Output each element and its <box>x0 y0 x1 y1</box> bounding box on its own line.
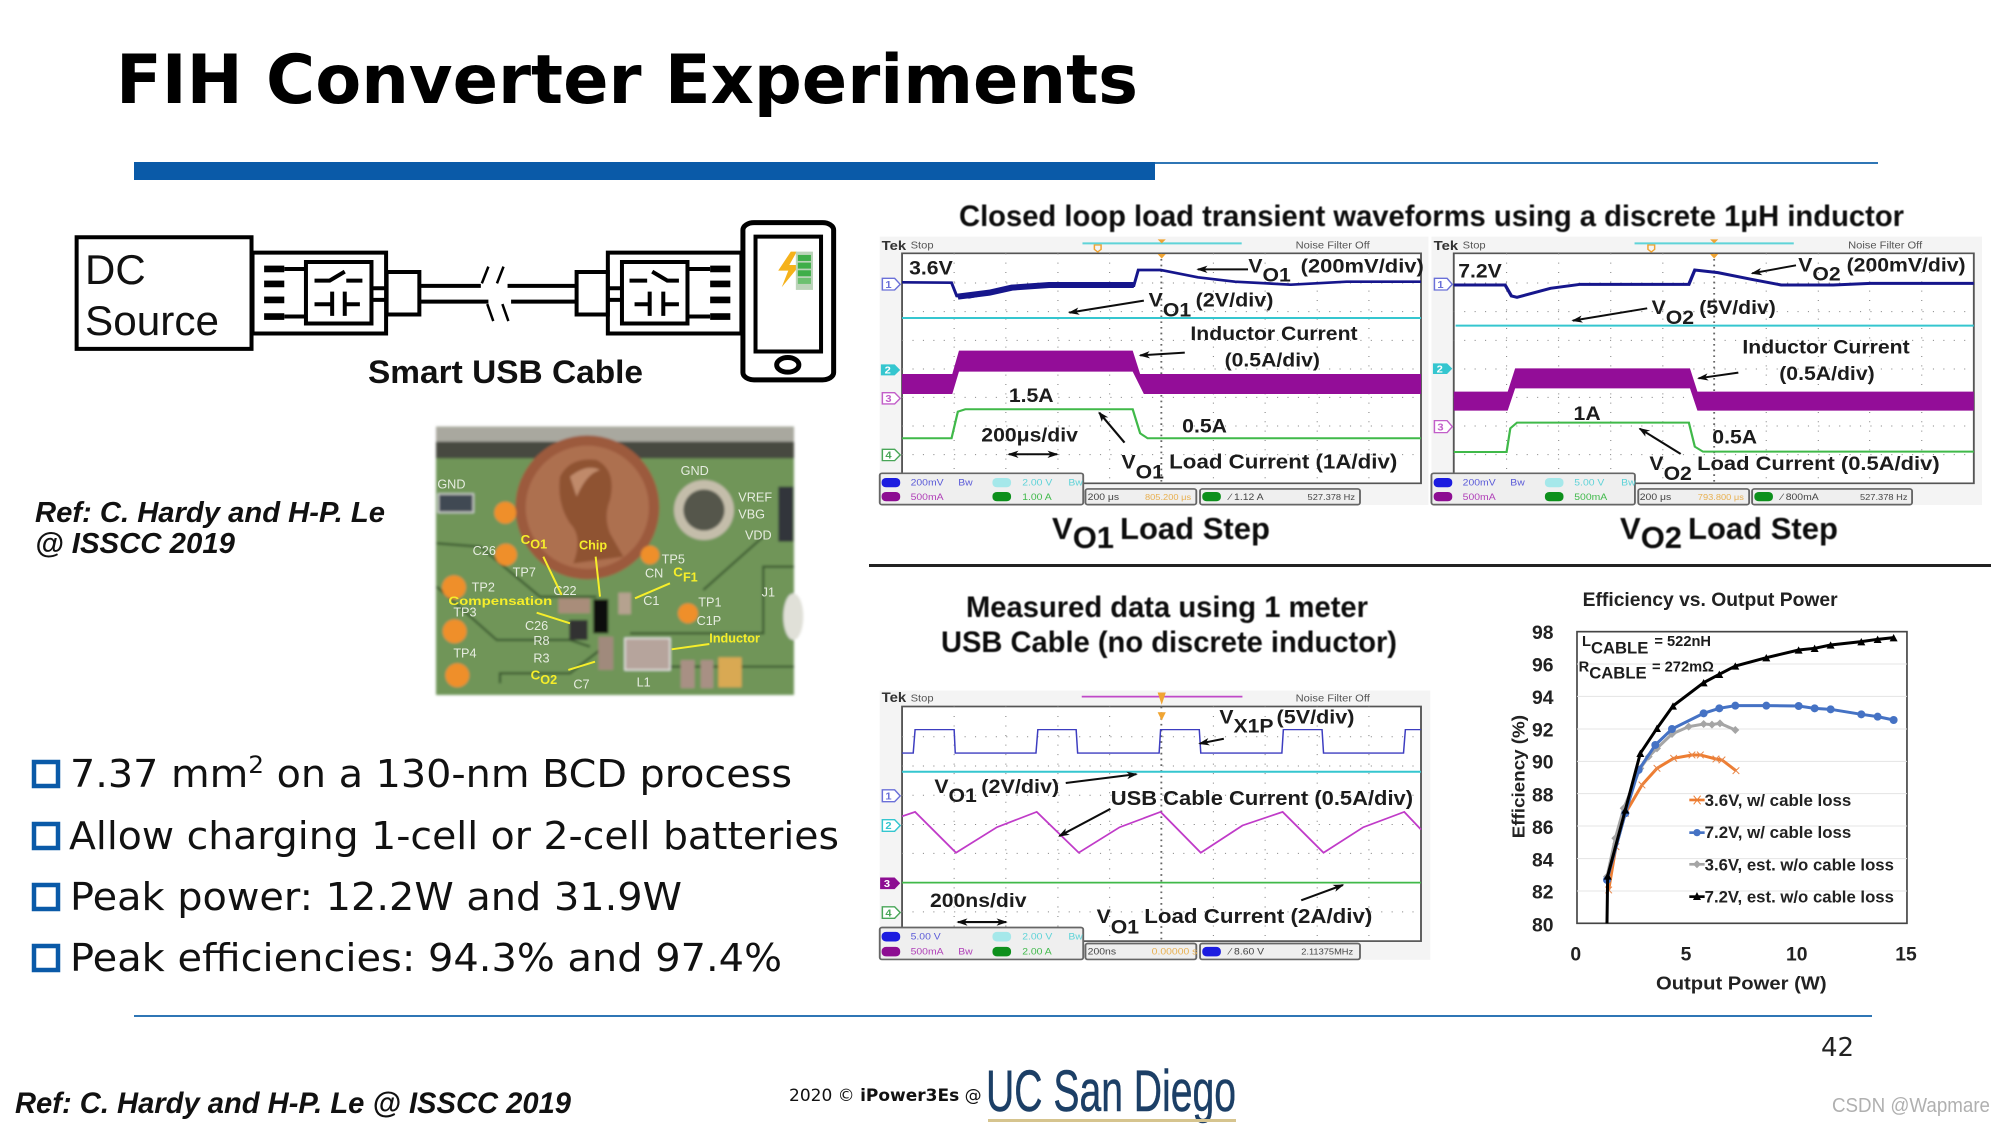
chart: efficiency vs output power <box>1509 590 1917 993</box>
silkscreen labels: GND <box>437 477 465 491</box>
readout boxes: 5.00 V <box>911 932 941 943</box>
annotations: Load Current (2A/div) <box>1144 905 1372 928</box>
photo: PCB with penny <box>436 427 803 695</box>
silkscreen labels: VBG <box>738 507 765 521</box>
series: 3.6V estimated <box>1607 723 1735 877</box>
annotations: X1P <box>1234 716 1274 737</box>
yellow annotations: Chip <box>579 538 607 552</box>
bullet 3: Peak power: 12.2W and 31.9W <box>70 875 682 920</box>
annotations <box>1458 256 1966 485</box>
caption: VO2 load step: V <box>1620 511 1641 546</box>
annotations: (0.5A/div) <box>1779 364 1875 385</box>
reference note <box>35 497 385 560</box>
annotations: 3.6V <box>909 258 953 279</box>
annotations: O1 <box>949 786 977 807</box>
readout boxes: 2.00 V <box>1022 932 1053 943</box>
trace: output voltage <box>902 315 1421 321</box>
annotations: (2V/div) <box>1196 290 1273 311</box>
silkscreen labels: C7 <box>573 677 590 691</box>
y axis labels: 84 <box>1532 850 1554 871</box>
x axis labels <box>1570 945 1917 966</box>
y axis labels: 86 <box>1532 818 1554 839</box>
bullet list <box>34 751 839 981</box>
readout boxes: 2.00 V <box>1022 478 1053 488</box>
heading: measured data: USB Cable (no discrete inductor) <box>941 626 1397 659</box>
chart title: Efficiency vs. Output Power <box>1583 590 1838 611</box>
yellow annotations: O2 <box>540 673 557 687</box>
silkscreen labels: R3 <box>533 652 550 666</box>
readout boxes: 2.11375MHz <box>1301 947 1353 957</box>
yellow annotations: C <box>673 565 683 580</box>
silkscreen labels: TP1 <box>698 596 722 610</box>
x axis labels: 5 <box>1681 945 1692 966</box>
readout boxes: 500mA <box>1574 492 1608 503</box>
channel markers: 1 <box>1437 279 1444 291</box>
annotations: Load Current (1A/div) <box>1169 451 1397 473</box>
DC source box <box>77 237 252 349</box>
heading: measured data: Measured data using 1 meter <box>966 591 1369 624</box>
annotations: V <box>1122 452 1136 473</box>
readout boxes: Bw <box>958 947 974 958</box>
annotations <box>930 706 1413 938</box>
yellow annotations: Compensation <box>448 595 552 608</box>
channel markers: 3 <box>885 393 892 405</box>
readout boxes: 527.378 Hz <box>1860 492 1907 502</box>
readout boxes: 5.00 V <box>1574 478 1605 488</box>
footer rule <box>134 1015 1872 1017</box>
scope: VO2 load step: Noise Filter Off <box>1848 240 1922 251</box>
y axis labels: 88 <box>1532 785 1554 806</box>
cable parameters: CABLE <box>1589 664 1647 683</box>
annotations: 1A <box>1574 404 1601 425</box>
readout boxes: ∕ 8.60 V <box>1226 947 1265 958</box>
x axis labels: 0 <box>1570 945 1581 966</box>
annotations: 7.2V <box>1458 261 1502 282</box>
y axis labels: 92 <box>1532 720 1553 741</box>
annotations: (200mV/div) <box>1847 256 1966 276</box>
readout boxes: Bw <box>1068 478 1084 488</box>
trace: inductor current <box>1454 368 1974 411</box>
trace: output voltage <box>902 769 1421 775</box>
silkscreen labels: TP2 <box>472 581 495 595</box>
yellow annotations: F1 <box>683 570 698 584</box>
readout boxes: ∕ 1.12 A <box>1227 492 1264 503</box>
left cable module <box>253 253 419 334</box>
readout boxes: Bw <box>958 478 974 488</box>
annotations: V <box>1798 256 1812 276</box>
axis titles: Output Power (W) <box>1656 972 1827 993</box>
silkscreen labels: TP5 <box>662 552 685 566</box>
silkscreen labels: TP4 <box>453 646 477 660</box>
channel markers <box>1433 278 1452 433</box>
annotations: V <box>1652 298 1666 319</box>
y axis labels: 98 <box>1532 623 1554 644</box>
y axis labels: 90 <box>1532 753 1553 774</box>
annotations: 1.5A <box>1009 386 1054 407</box>
silkscreen labels: C1 <box>643 594 659 608</box>
scope: USB cable waveforms <box>880 691 1430 960</box>
channel markers: 4 <box>885 450 892 461</box>
silkscreen labels: GND <box>681 464 709 478</box>
cable with break <box>419 286 577 302</box>
annotations: 0.5A <box>1182 417 1227 437</box>
reference note: @ ISSCC 2019 <box>35 528 235 560</box>
bullet 4: Peak efficiencies: 94.3% and 97.4% <box>70 936 782 981</box>
channel markers: 1 <box>885 279 892 291</box>
silkscreen labels: R8 <box>533 634 550 648</box>
channel markers: 2 <box>1437 364 1443 375</box>
annotations: O1 <box>1111 917 1139 938</box>
cable parameters: L <box>1582 634 1591 650</box>
annotations: 200μs/div <box>981 426 1079 446</box>
yellow annotations: C <box>531 667 540 682</box>
page number: 42 <box>1821 1033 1854 1063</box>
bullet 1: 2 <box>248 751 264 779</box>
annotations: (2V/div) <box>981 776 1059 798</box>
annotations: Inductor Current <box>1742 337 1910 358</box>
annotations: V <box>934 777 949 798</box>
scope: VO2 load step <box>1431 237 1982 505</box>
channel markers: 2 <box>885 365 891 376</box>
annotations: O2 <box>1812 264 1841 285</box>
silkscreen labels: TP3 <box>453 606 477 620</box>
silkscreen labels: CN <box>645 566 663 580</box>
readout boxes: 500mA <box>911 492 944 503</box>
heading: measured data <box>941 591 1397 659</box>
silkscreen labels: TP7 <box>513 566 536 580</box>
readout boxes: 1.00 A <box>1022 492 1052 503</box>
bullet 2: Allow charging 1-cell or 2-cell batteries <box>69 814 839 859</box>
trace: cable current <box>902 812 1421 853</box>
annotations: V <box>1219 707 1234 728</box>
silkscreen labels <box>437 464 775 691</box>
annotations: O2 <box>1664 464 1692 485</box>
silkscreen labels: J1 <box>762 586 775 600</box>
scope: USB cable waveforms: Stop <box>911 693 934 704</box>
channel markers: 1 <box>885 791 892 803</box>
section divider <box>869 564 1991 567</box>
annotations: O2 <box>1666 308 1694 329</box>
silkscreen labels: C1P <box>697 614 721 628</box>
annotations: (5V/div) <box>1699 298 1776 319</box>
annotations: O1 <box>1136 462 1164 483</box>
caption: VO1 load step: O1 <box>1073 520 1114 555</box>
annotations: (0.5A/div) <box>1225 351 1320 371</box>
scope: USB cable waveforms: Noise Filter Off <box>1296 693 1370 704</box>
readout boxes: 200 μs <box>1640 492 1671 503</box>
title: FIH Converter Experiments <box>116 41 1138 120</box>
readout boxes: 200 μs <box>1088 492 1119 503</box>
yellow annotations: Inductor <box>709 632 760 646</box>
silkscreen labels: VREF <box>738 491 772 505</box>
scope: VO1 load step: Stop <box>911 240 934 251</box>
bullet 1: 7.37 mm <box>70 752 243 797</box>
scope: VO1 load step <box>880 237 1428 505</box>
chart: efficiency vs output power: Efficiency (%) <box>1509 715 1529 838</box>
silkscreen labels: C26 <box>525 619 548 633</box>
yellow annotations: O1 <box>530 538 547 552</box>
annotations: V <box>1248 257 1263 277</box>
silkscreen labels: C22 <box>553 584 577 598</box>
readout boxes: 805.200 μs <box>1145 492 1192 502</box>
annotations: 200ns/div <box>930 891 1027 912</box>
caption: VO1 load step: V <box>1052 511 1073 546</box>
channel markers: 2 <box>885 821 892 832</box>
readout boxes: 2.00 A <box>1022 947 1052 958</box>
readout boxes: 500mA <box>911 947 944 958</box>
heading: closed loop: Closed loop load transient waveforms using a discrete 1μH inductor <box>959 200 1905 233</box>
x axis labels: 15 <box>1895 945 1917 966</box>
channel markers: 3 <box>884 878 890 890</box>
legend: 3.6V, w/ cable loss <box>1705 791 1851 810</box>
smart usb cable label: Smart USB Cable <box>368 354 643 390</box>
readout boxes: 500mA <box>1463 492 1496 503</box>
channel markers: 3 <box>1437 422 1444 433</box>
cable parameters <box>1579 634 1714 683</box>
y axis labels: 82 <box>1532 883 1553 904</box>
readout boxes: 793.800 μs <box>1698 492 1745 502</box>
readout boxes <box>1431 473 1912 505</box>
trace: load current <box>1454 423 1974 452</box>
diagram: smart USB cable <box>77 223 834 390</box>
silkscreen labels: VDD <box>745 528 772 542</box>
phone icon <box>743 223 834 380</box>
annotations: USB Cable Current (0.5A/div) <box>1111 788 1413 810</box>
header labels: Tek <box>1434 238 1458 253</box>
readout boxes: Bw <box>1510 478 1526 488</box>
readout boxes: 200mV <box>911 478 944 488</box>
legend <box>1689 791 1894 906</box>
trace: output voltage ripple <box>902 270 1421 297</box>
readout boxes: 200mV <box>1463 478 1496 488</box>
trace: output voltage <box>1456 323 1974 329</box>
annotations: Load Current (0.5A/div) <box>1697 453 1940 475</box>
legend: 3.6V, est. w/o cable loss <box>1705 855 1894 874</box>
header labels: Tek <box>882 691 906 706</box>
annotations: O1 <box>1263 265 1291 286</box>
readout boxes: Bw <box>1621 478 1637 488</box>
series: 7.2V estimated <box>1607 638 1894 923</box>
trace: switching node <box>902 730 1421 753</box>
cable parameters: = 272mΩ <box>1648 659 1714 675</box>
scope: VO2 load step: Stop <box>1463 240 1486 251</box>
plot frame and grid <box>1577 632 1907 923</box>
annotations: (200mV/div) <box>1295 256 1424 277</box>
cable parameters: = 522nH <box>1650 634 1711 650</box>
bullet 1: on a 130-nm BCD process <box>264 752 792 797</box>
readout boxes <box>880 473 1360 505</box>
channel markers: 4 <box>885 908 892 919</box>
watermark: CSDN @Wapmare <box>1832 1095 1990 1117</box>
annotations <box>909 256 1424 483</box>
series: 7.2V with cable loss <box>1607 706 1894 880</box>
y axis labels: 96 <box>1532 655 1554 676</box>
channel markers <box>880 790 900 919</box>
readout boxes: Bw <box>1068 932 1084 943</box>
x axis labels: 10 <box>1786 945 1807 966</box>
logo: UC San Diego: UC San Diego <box>986 1059 1236 1124</box>
y axis labels: 94 <box>1532 688 1554 709</box>
caption: VO1 load step: Load Step <box>1120 511 1270 546</box>
trace: output voltage ripple <box>1454 270 1974 297</box>
annotations: V <box>1649 454 1664 475</box>
legend: 7.2V, w/ cable loss <box>1705 823 1851 842</box>
right cable module <box>577 253 741 334</box>
trace: inductor current <box>902 351 1421 394</box>
readout boxes: ∕ 800mA <box>1779 492 1819 503</box>
trace: load current <box>902 880 1421 885</box>
legend: 7.2V, est. w/o cable loss <box>1705 887 1894 906</box>
title rule <box>134 162 1878 180</box>
readout boxes: 200ns <box>1088 947 1116 958</box>
readout boxes: 527.378 Hz <box>1308 492 1355 502</box>
bullet 1 <box>34 751 792 797</box>
scope: VO1 load step: Noise Filter Off <box>1296 240 1370 251</box>
yellow annotations <box>448 532 760 687</box>
footer copyright: 2020 © iPower3Es @ <box>789 1086 982 1106</box>
yellow annotations: C <box>521 532 530 547</box>
silkscreen labels: C26 <box>473 544 496 558</box>
annotations: O1 <box>1163 301 1191 321</box>
cable parameters: R <box>1579 659 1589 675</box>
readout boxes <box>880 928 1360 959</box>
annotations: V <box>1149 291 1163 311</box>
y axis labels <box>1532 623 1554 936</box>
caption: VO2 load step: Load Step <box>1688 511 1838 546</box>
silkscreen labels: L1 <box>637 676 651 690</box>
cable parameters: CABLE <box>1591 638 1648 657</box>
header labels: Tek <box>882 238 906 253</box>
y axis labels: 80 <box>1532 915 1553 936</box>
annotations: V <box>1097 907 1111 928</box>
annotations: (5V/div) <box>1277 706 1354 728</box>
diagram: smart USB cable: Source <box>85 297 219 344</box>
annotations: 0.5A <box>1712 427 1757 448</box>
annotations: Inductor Current <box>1190 324 1358 345</box>
trace: load current <box>902 409 1421 438</box>
channel markers <box>881 278 900 461</box>
DC source label: DC <box>85 246 146 293</box>
series: 3.6V with cable loss <box>1609 755 1736 890</box>
caption: VO2 load step: O2 <box>1641 520 1682 555</box>
logo: UC San Diego <box>986 1059 1236 1124</box>
reference note: Ref: C. Hardy and H-P. Le <box>35 497 385 529</box>
readout boxes: 0.00000 s <box>1152 947 1197 958</box>
footer reference: Ref: C. Hardy and H-P. Le @ ISSCC 2019 <box>15 1087 571 1120</box>
